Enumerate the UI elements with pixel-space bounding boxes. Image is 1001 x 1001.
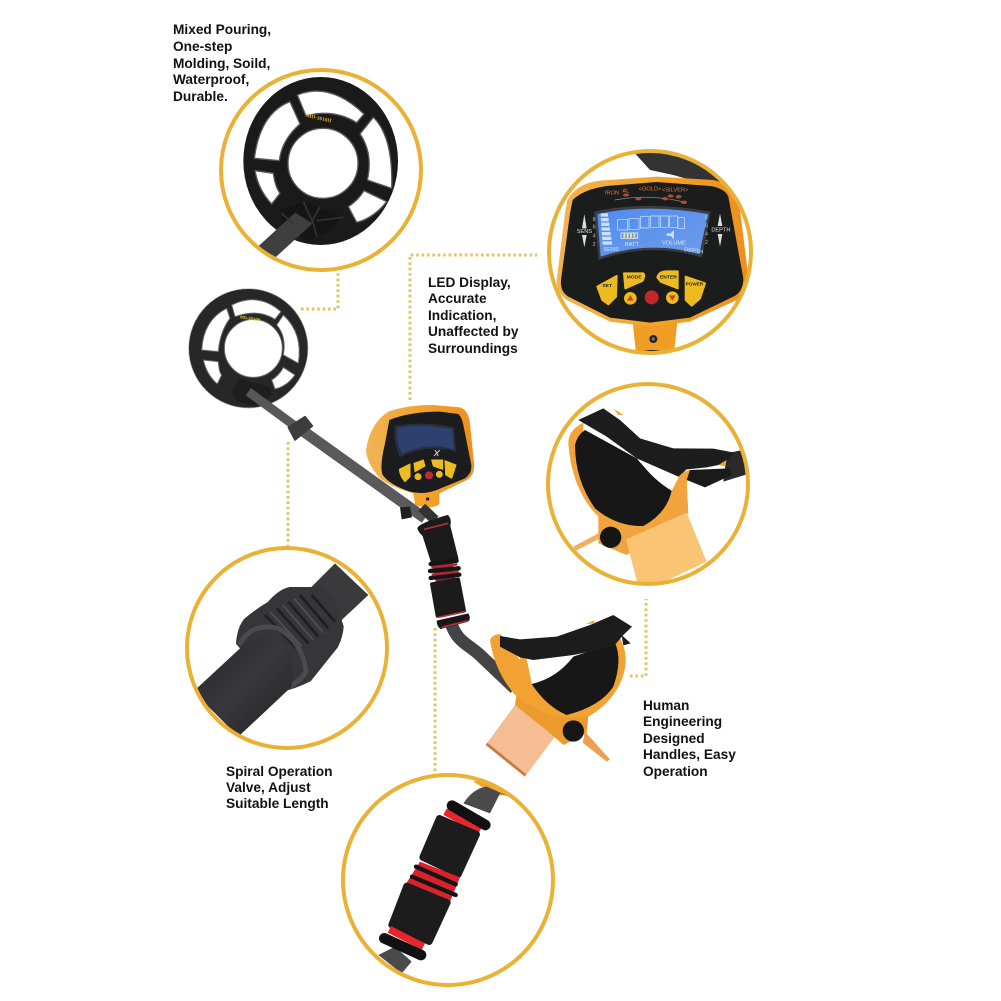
rod [723,450,746,482]
circle: display close-up: BATT [625,242,640,248]
circle: display close-up [549,151,751,354]
circle: display close-up: SENS [603,247,619,253]
lcd [594,206,711,260]
buttons [597,271,705,306]
tube top [463,786,509,814]
caption: coil: Waterproof, [173,72,249,87]
caption: valve: Suitable Length [226,796,329,811]
foam 1 [423,818,477,874]
strap [578,408,734,477]
circle: display close-up: 6 [705,223,708,229]
strap [500,615,632,660]
circle: display close-up: 8 [705,215,708,221]
circle: display close-up: 6 [593,225,596,231]
circle: display close-up: SET [602,283,612,289]
circle: display close-up: 2 [705,240,708,246]
circle: display close-up: POWER [686,282,704,287]
connector: coil callout [301,273,338,309]
lower tube [198,648,292,734]
orange part at top [473,780,506,796]
caption: handle: Operation [643,764,708,779]
icon: search coil [243,77,398,245]
plate [486,705,555,777]
circle: display close-up: ENTER [660,274,677,280]
coil windows [254,91,392,222]
body [557,177,748,327]
buttons [399,460,456,482]
search coil [189,289,425,519]
caption: display: Surroundings [428,341,518,356]
circle: display close-up: VOLUME [662,240,686,246]
face [561,182,743,323]
top cap and red band [445,812,480,831]
circle: display close-up: 4 [593,233,596,239]
ring [187,548,387,748]
caption: coil: Durable. [173,89,228,104]
connector: valve callout [286,442,290,546]
sens and depth scales: SENS [577,229,592,235]
white gap [642,464,679,491]
circle: foam grip close-up [343,775,553,985]
circle: display close-up: <GOLD> [639,187,662,193]
circle: display close-up: 2 [593,242,596,248]
metal detector [189,289,632,777]
grip core [438,540,452,613]
collar [288,417,312,440]
caption: coil: Molding, Soild, [173,56,270,71]
circle: display close-up: MODE [627,274,642,280]
caption: valve [226,764,332,811]
caption: handle: Human [643,698,689,713]
search coil: MD-3010II [240,314,261,322]
collar front ring [239,627,306,689]
control box [366,405,474,508]
circle: display close-up: 8 [593,217,596,223]
bottom band and cap [389,929,423,947]
coil mount [280,202,343,240]
ring [343,775,553,985]
neck [633,323,678,351]
peg [573,533,600,551]
caption: handle: Designed [643,731,705,746]
main coil windows [202,300,299,389]
caption: display: Unaffected by [428,324,519,339]
rings [430,561,459,578]
base and peg [515,693,588,745]
circle: spiral valve close-up [187,548,387,748]
plate [626,512,707,582]
caption: display [428,275,519,356]
knob [400,507,412,519]
tube bottom [378,947,412,973]
cuff [568,423,691,530]
connector: handle callout [630,599,646,676]
circle: display close-up: <SILVER> [662,187,689,193]
rings [412,867,456,895]
caption: coil: One-step [173,39,232,54]
rod upper [248,392,295,426]
circle: handle close-up [548,384,750,593]
circle: display close-up: DEPTH [711,227,731,233]
strap behind display [636,153,720,182]
screw [563,720,584,742]
centre red section [407,862,460,902]
caption: handle: Handles, Easy [643,747,736,762]
cuff [490,633,626,717]
circle: coil close-up: MD-3010II [306,113,332,125]
pad [575,430,672,526]
caption: handle: Engineering [643,714,722,729]
base [598,480,688,555]
foam 2 [392,886,447,942]
screw [600,527,621,548]
upper tube [308,563,368,622]
caption: coil [173,22,271,104]
caption: display: Indication, [428,308,496,323]
meter labels: IRON [605,191,619,197]
foam 2 [432,579,464,616]
ring [548,384,748,584]
collar ribs [265,595,335,648]
foam 1 [419,517,457,564]
lower tube [450,620,515,688]
connector: display callout [410,255,537,400]
pad [532,643,618,715]
circle: coil close-up [221,70,421,270]
rod lower [302,430,425,518]
caption: display: LED Display, [428,275,511,290]
ring [221,70,421,270]
grip and handle [419,507,632,777]
circle: display close-up: DEPTH [684,247,704,256]
circle: display close-up: AL [622,189,629,195]
connector: grip callout [434,628,436,771]
collar [237,588,342,691]
caption: valve: Spiral Operation [226,764,332,779]
circle: display close-up: 4 [705,231,708,237]
ring [549,151,751,353]
caption: handle [643,698,736,779]
caption: coil: Mixed Pouring, [173,22,271,37]
caption: valve: Valve, Adjust [226,780,311,795]
caption: display: Accurate [428,291,487,306]
